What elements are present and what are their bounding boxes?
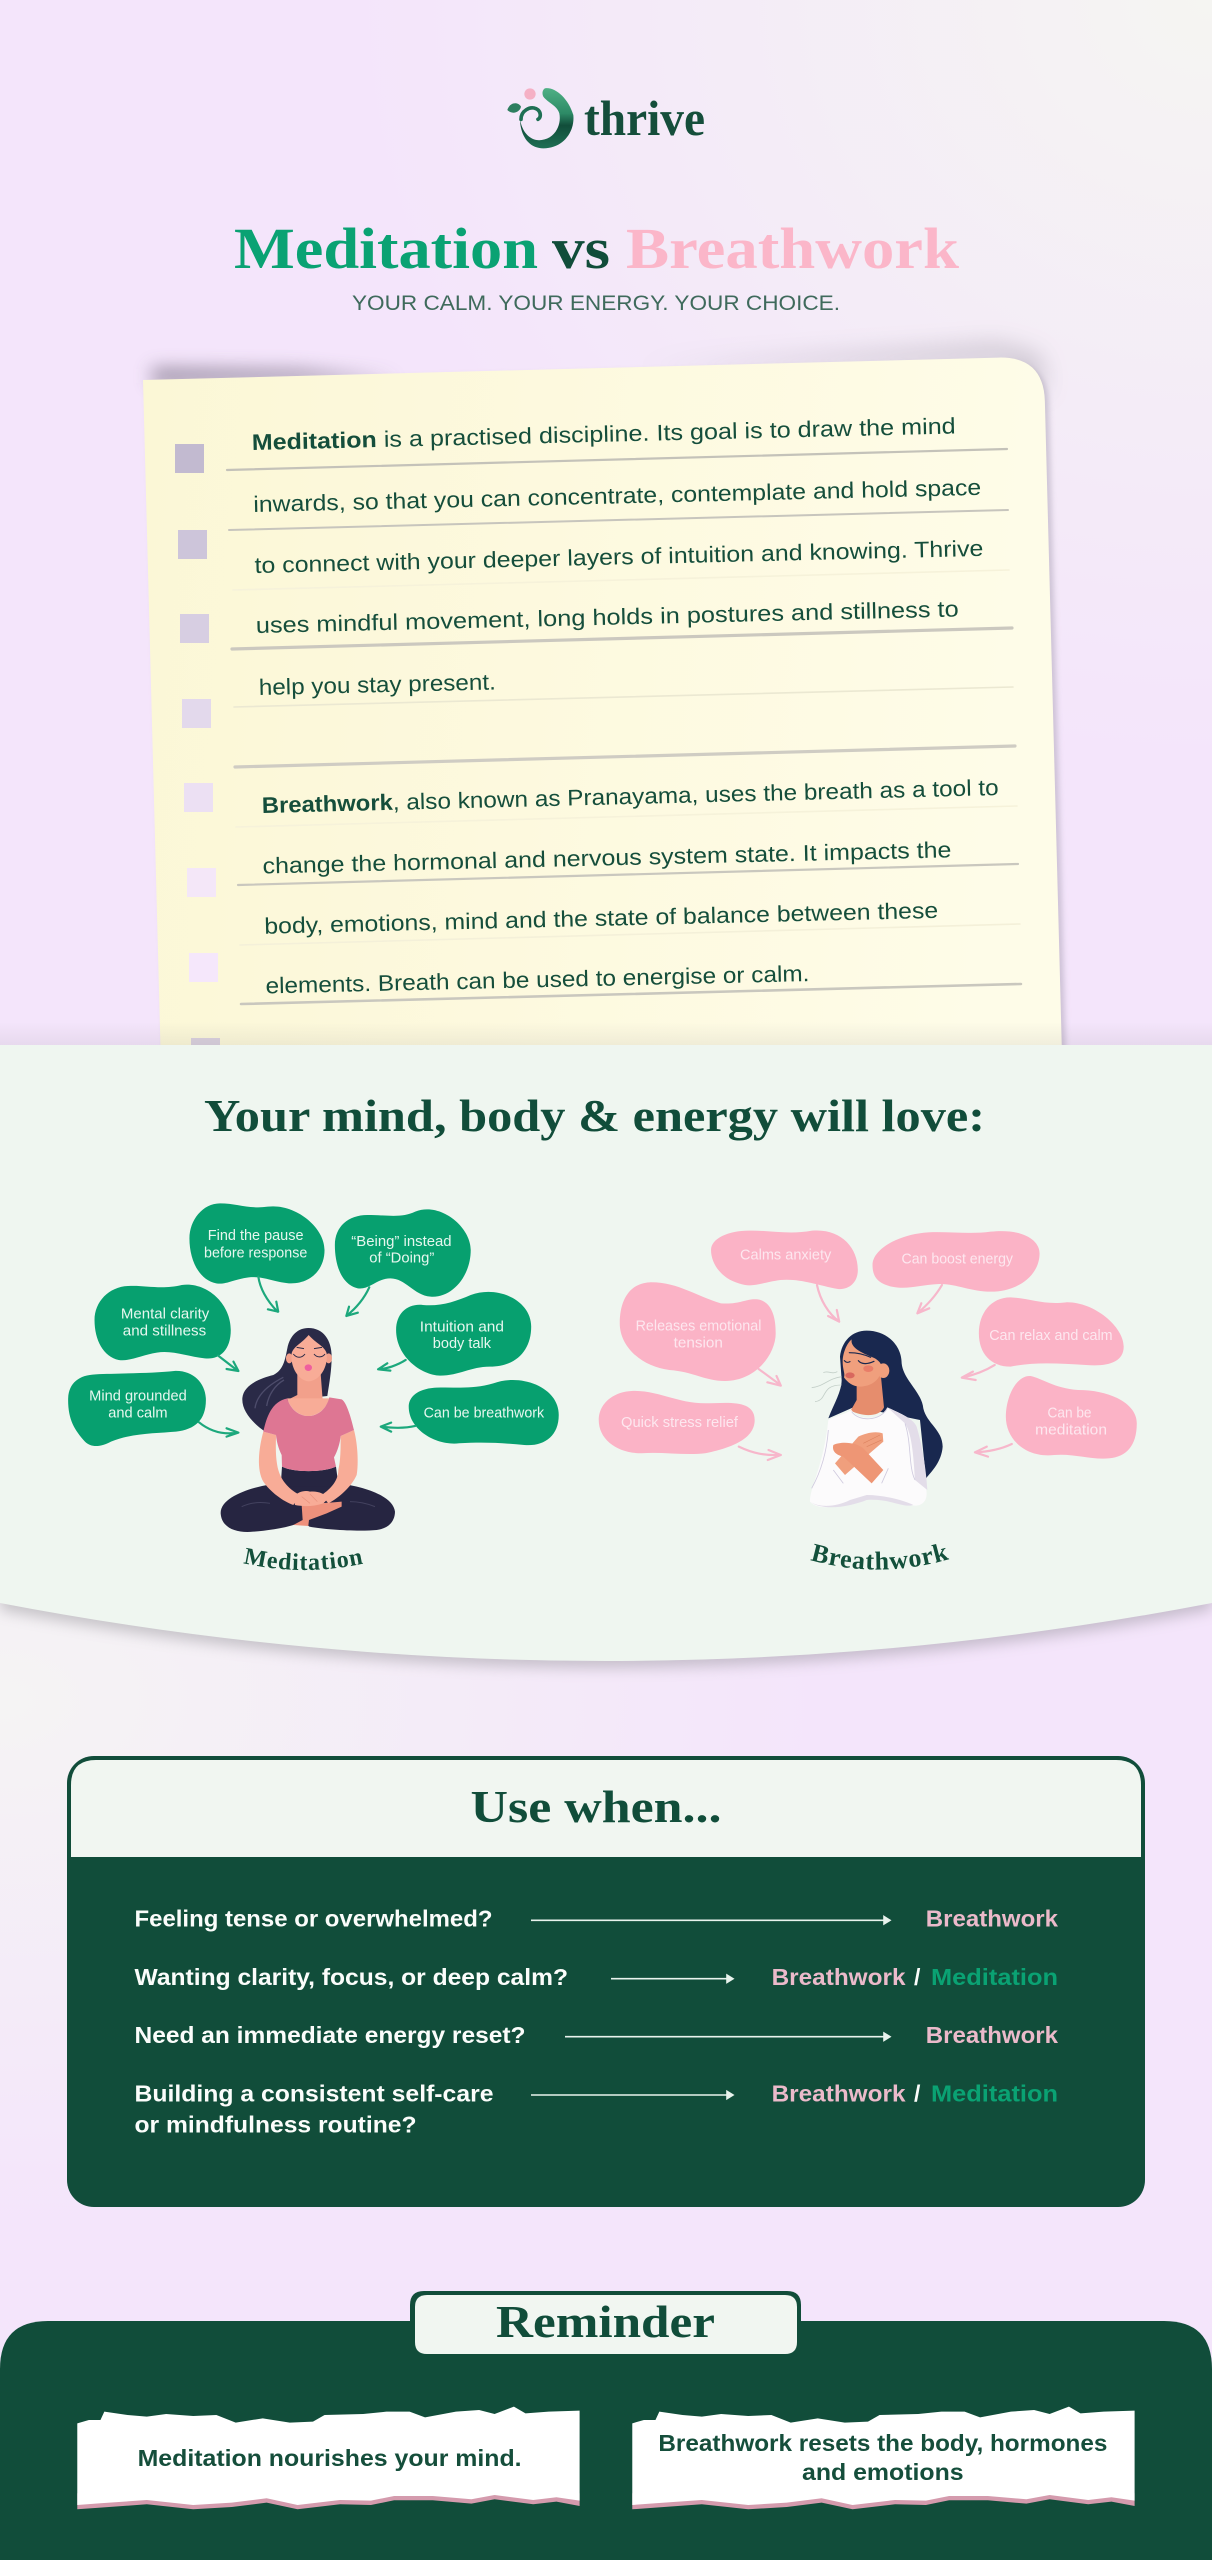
title: Breathwork [626, 216, 960, 281]
panel: use when [67, 1756, 1145, 2207]
text block: meditation definition: uses mindful movement, long holds in postures and stillness to [256, 596, 959, 638]
panel: notebook paper [143, 344, 1067, 1100]
meditation bubbles [68, 1203, 559, 1446]
meditation bubble labels: Can be breathwork [424, 1406, 545, 1422]
title: Meditation [234, 216, 538, 281]
row: wanting clarity: Meditation [931, 1964, 1058, 1990]
text block: meditation definition: is a practised discipline. Its goal is to draw the mind [383, 413, 956, 452]
breathwork bubble labels [621, 1247, 1113, 1438]
figure: seated meditating woman [221, 1328, 395, 1532]
meditation bubble labels: Intuition and [420, 1319, 504, 1335]
subtitle: YOUR CALM. YOUR ENERGY. YOUR CHOICE. [352, 292, 840, 315]
meditation bubble labels: Mental clarity [121, 1306, 210, 1322]
row: building routine: Meditation [931, 2081, 1058, 2107]
label: breathwork curved: Breathwork [810, 1544, 950, 1570]
text block: breathwork definition: , also known as Pranayama, uses the breath as a tool to [392, 775, 999, 815]
ruled lines [227, 449, 1021, 1004]
breathwork bubble labels: Releases emotional [636, 1318, 761, 1334]
text block: breathwork definition: change the hormonal and nervous system state. It impacts the [262, 837, 952, 878]
title [234, 216, 960, 281]
text block: meditation definition [252, 413, 984, 700]
row: need energy reset: Breathwork [926, 2022, 1058, 2048]
label: meditation curved [243, 1548, 364, 1570]
text block: breathwork definition: Breathwork [262, 790, 394, 818]
row: wanting clarity: Breathwork [772, 1964, 906, 1990]
meditation bubble labels: before response [204, 1245, 307, 1261]
punched holes [175, 444, 220, 1050]
row: building routine: Breathwork [772, 2081, 906, 2107]
torn note: breathwork: and emotions [802, 2459, 964, 2485]
text block: meditation definition: to connect with your deeper layers of intuition and knowing. Thrive [254, 536, 984, 578]
row: wanting clarity [134, 1964, 1058, 1990]
row: feeling tense: Breathwork [926, 1906, 1058, 1932]
title: vs [552, 216, 610, 281]
row: building routine: / [914, 2081, 921, 2107]
row: wanting clarity: Wanting clarity, focus, or deep calm? [134, 1964, 568, 1990]
row: wanting clarity: / [914, 1964, 921, 1990]
breathwork bubble labels: Can be [1048, 1405, 1092, 1421]
logo: thrive: thrive [584, 90, 705, 146]
text block: meditation definition: help you stay present. [259, 669, 496, 700]
torn note: meditation [77, 2407, 580, 2509]
row: feeling tense: Feeling tense or overwhelmed? [134, 1906, 492, 1932]
breathwork bubbles [599, 1230, 1137, 1459]
panel: benefits [0, 1036, 1212, 1674]
breathwork bubble labels: tension [674, 1335, 723, 1351]
breathwork bubble labels: Can relax and calm [989, 1328, 1113, 1344]
meditation bubble labels: Find the pause [208, 1228, 304, 1244]
torn note: meditation: Meditation nourishes your mind. [138, 2445, 522, 2471]
meditation bubble labels: of “Doing” [369, 1251, 434, 1267]
meditation bubble labels: Mind grounded [89, 1388, 187, 1404]
text block: breathwork definition: body, emotions, mind and the state of balance between these [264, 898, 938, 939]
meditation bubble labels: and stillness [123, 1324, 206, 1340]
logo: thrive [507, 88, 705, 148]
panel: reminder [0, 2291, 1212, 2560]
figure: woman breathing with hands on chest [810, 1331, 943, 1507]
row: building routine [134, 2081, 1058, 2138]
meditation bubble labels: body talk [433, 1336, 492, 1352]
tab: reminder heading [410, 2291, 801, 2354]
meditation bubble labels [89, 1228, 545, 1422]
breathwork bubble labels: meditation [1035, 1422, 1107, 1438]
breathwork bubble labels: Can boost energy [902, 1251, 1014, 1267]
breathwork bubble labels: Quick stress relief [621, 1415, 739, 1431]
heading: love: Your mind, body & energy will love: [204, 1090, 985, 1141]
text block: breathwork definition: elements. Breath can be used to energise or calm. [265, 961, 810, 998]
breathwork bubble labels: Calms anxiety [740, 1247, 832, 1263]
torn note: breathwork: Breathwork resets the body, hormones [658, 2430, 1107, 2456]
row: need energy reset [134, 2022, 1058, 2048]
heading: use when: Use when... [470, 1782, 722, 1832]
meditation arrows [199, 1277, 415, 1437]
label: breathwork curved [810, 1544, 950, 1570]
icon: swirl mark [507, 88, 573, 148]
row: feeling tense [134, 1906, 1058, 1932]
meditation bubble labels: “Being” instead [351, 1234, 452, 1250]
row: building routine: or mindfulness routine? [134, 2112, 416, 2138]
label: meditation curved: Meditation [243, 1548, 364, 1570]
row: building routine: Building a consistent self-care [134, 2081, 494, 2107]
text block: breathwork definition [262, 775, 999, 998]
tab: reminder heading: Reminder [496, 2297, 715, 2347]
torn note: breathwork [632, 2407, 1135, 2509]
breathwork arrows [739, 1285, 1012, 1460]
text block: meditation definition: Meditation [252, 427, 377, 455]
text block: meditation definition: inwards, so that you can concentrate, contemplate and hold space [253, 475, 981, 517]
meditation bubble labels: and calm [108, 1405, 168, 1421]
row: need energy reset: Need an immediate energy reset? [134, 2022, 526, 2048]
